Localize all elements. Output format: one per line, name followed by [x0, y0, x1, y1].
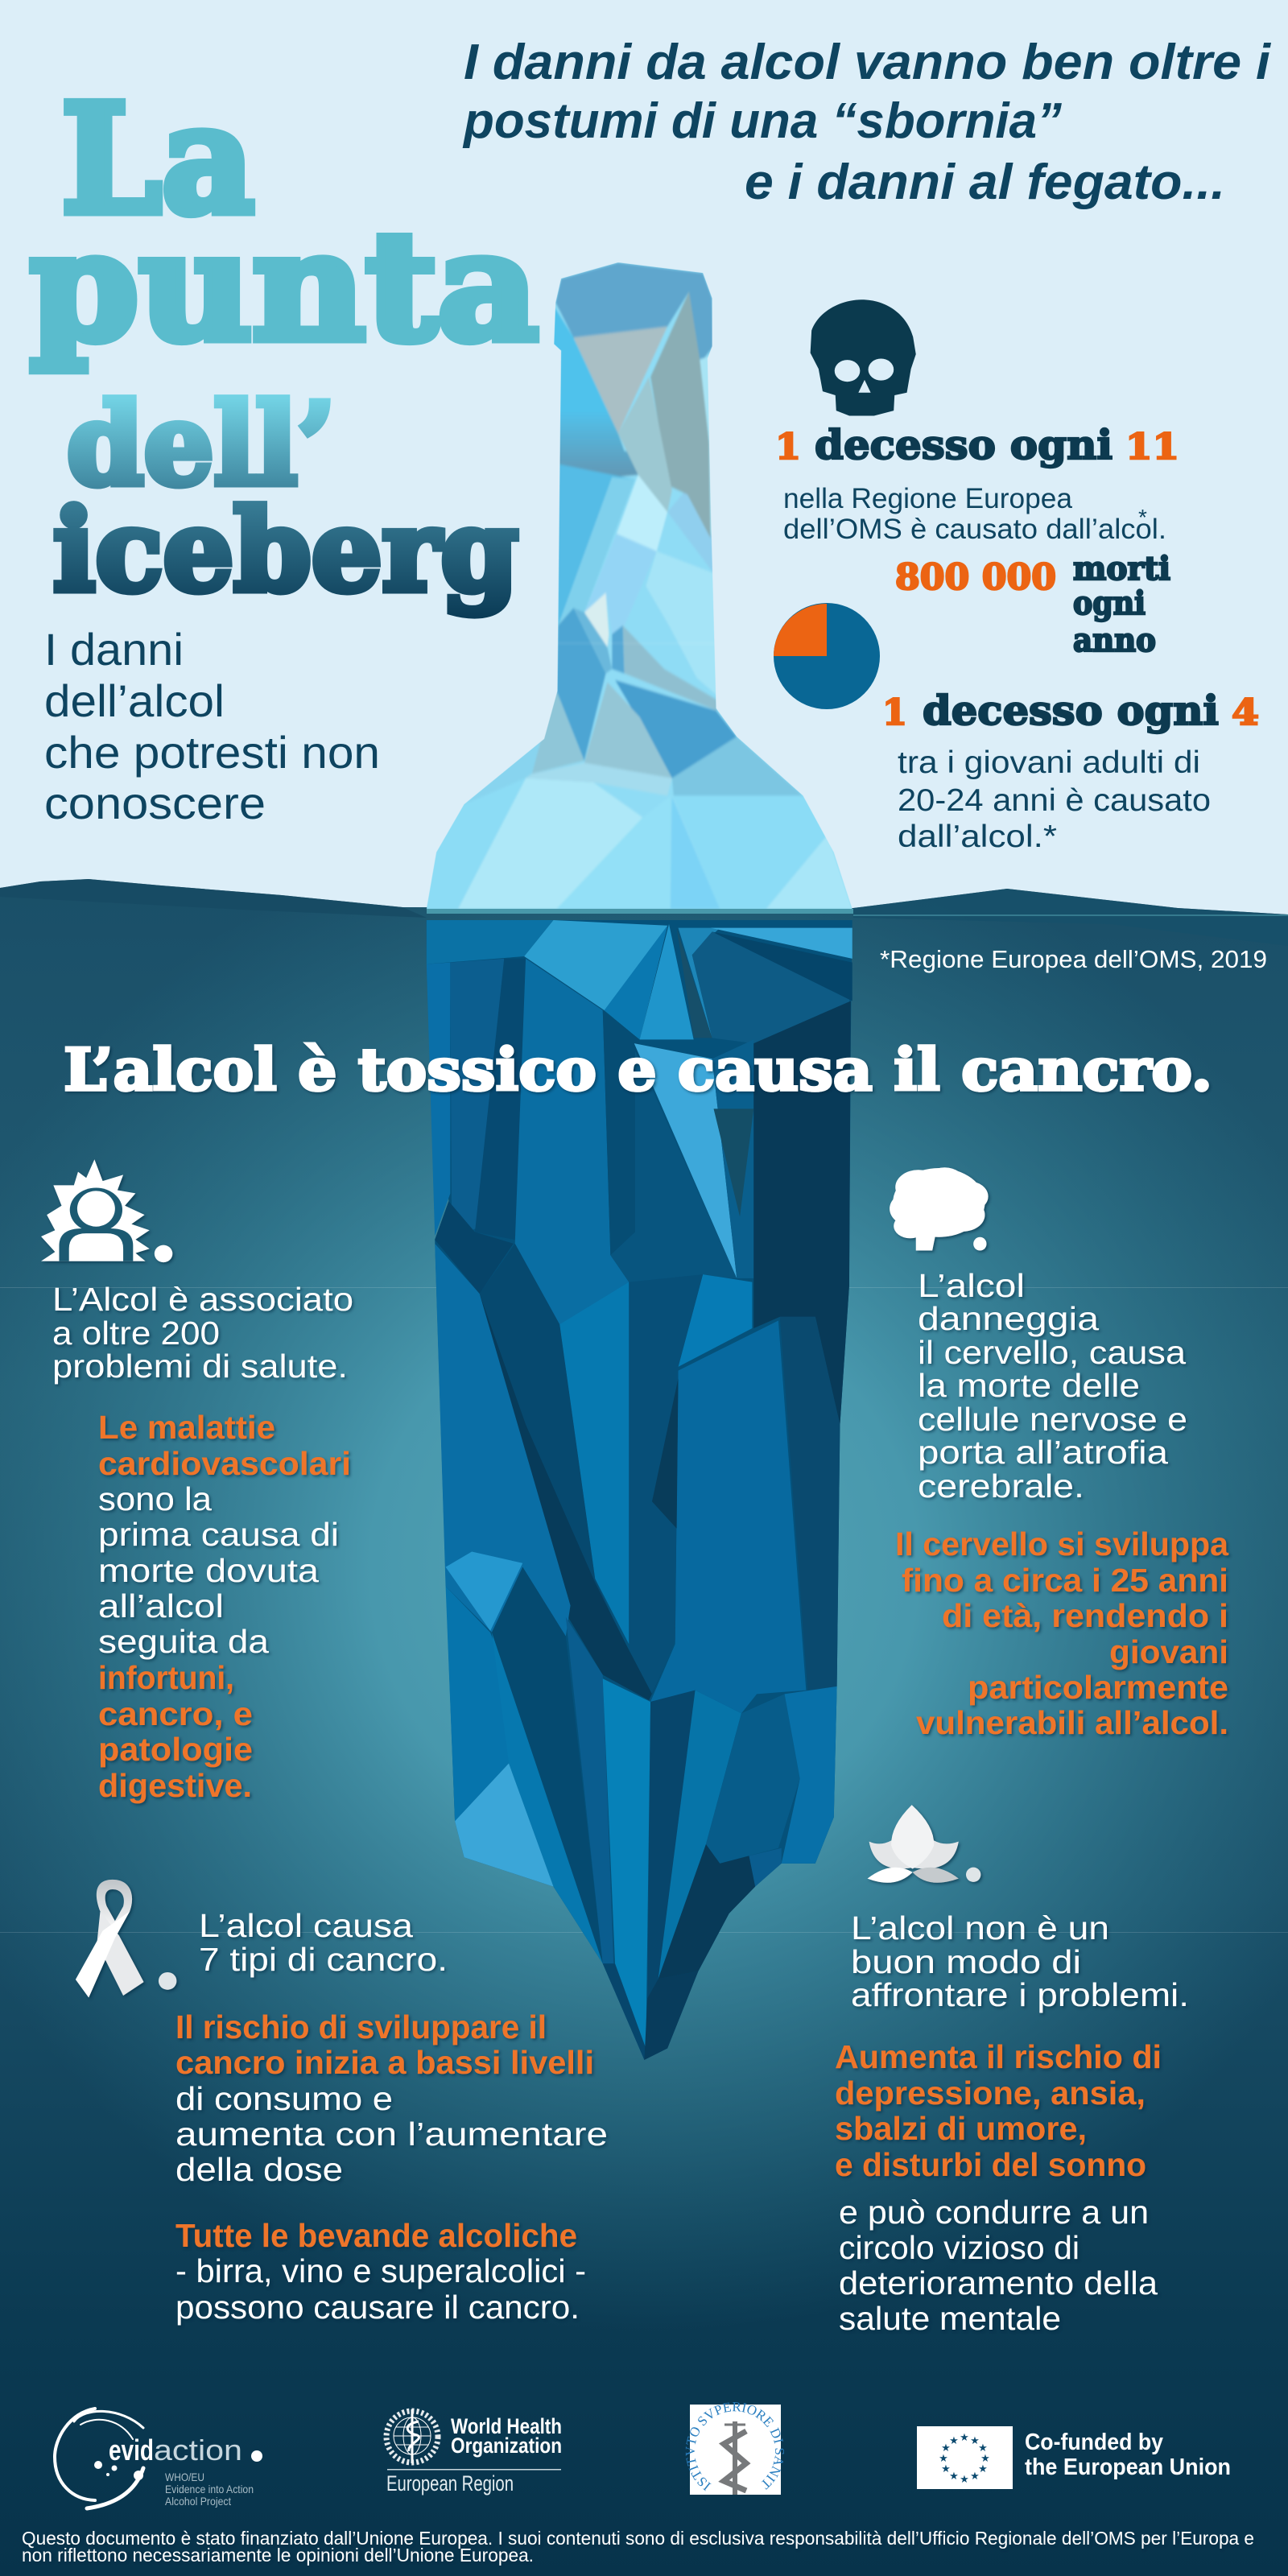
- stat text: European Region: dell’OMS è causato dall’alcol.: [783, 514, 1166, 545]
- main title: iceberg: [53, 485, 518, 617]
- stat: 800 000 deaths: morti: [1073, 550, 1170, 588]
- text: depression risk: depressione, ansia,: [835, 2074, 1146, 2112]
- text: developing brain: vulnerabili all’alcol.: [916, 1704, 1228, 1741]
- text: all alcoholic drinks: possono causare il cancro.: [175, 2289, 580, 2326]
- stat: 1 death in 11: decesso ogni: [815, 421, 1113, 469]
- subtitle: I danni: [44, 624, 184, 675]
- text: brain damage: danneggia: [918, 1300, 1099, 1337]
- logo: evidaction: [55, 2409, 262, 2508]
- main title: [30, 71, 539, 617]
- heading top right: e i danni al fegato...: [745, 155, 1225, 210]
- disclaimer: Questo documento è stato finanziato dall’Unione Europea. I suoi contenuti sono di esclusiva responsabilità dell’Ufficio Regionale dell’OMS per l’Europa e: [22, 2528, 1254, 2549]
- logo: evidaction: Alcohol Project: [165, 2495, 231, 2508]
- text: all alcoholic drinks: [175, 2217, 586, 2326]
- text: vicious circle: e può condurre a un: [839, 2194, 1149, 2231]
- text: risk at low levels: di consumo e: [175, 2080, 393, 2117]
- text: developing brain: particolarmente: [968, 1669, 1228, 1706]
- stat: 1 death in 4: 1: [882, 692, 907, 733]
- logo: European Union flag: ★: [941, 2463, 951, 2475]
- text: vicious circle: deterioramento della: [839, 2264, 1158, 2301]
- stat text: young adults: tra i giovani adulti di: [898, 745, 1200, 780]
- water line: [427, 909, 853, 914]
- text: brain damage: L’alcol: [918, 1267, 1025, 1304]
- logo: European Union flag: ★: [980, 2453, 990, 2465]
- text: over 200 problems: L’Alcol è associato: [52, 1281, 353, 1318]
- logo: evidaction: WHO/EU: [165, 2471, 204, 2483]
- text: over 200 problems: problemi di salute.: [52, 1348, 348, 1385]
- icon: lotus: [868, 1805, 980, 1883]
- text: developing brain: Il cervello si sviluppa: [895, 1525, 1229, 1563]
- text: cardiovascular diseases: all’alcol: [98, 1587, 224, 1624]
- logo: World Health Organization: [386, 2409, 562, 2496]
- text: all alcoholic drinks: Tutte le bevande alcoliche: [175, 2217, 577, 2254]
- text: not a way to cope: affrontare i problemi.: [851, 1976, 1189, 2013]
- text: depression risk: sbalzi di umore,: [835, 2110, 1087, 2147]
- pie chart: one quarter: [774, 603, 880, 709]
- text: cardiovascular diseases: cancro, e: [98, 1695, 253, 1732]
- text: risk at low levels: Il rischio di sviluppare il: [175, 2008, 547, 2046]
- text: cardiovascular diseases: sono la: [98, 1480, 212, 1517]
- panel: health problems: [41, 1159, 353, 1804]
- text: seven cancers: L’alcol causa: [199, 1907, 413, 1944]
- text: developing brain: [895, 1525, 1229, 1741]
- text: brain damage: il cervello, causa: [918, 1334, 1186, 1371]
- main title: punta: [30, 198, 539, 374]
- stat: 800 000 deaths: [895, 550, 1170, 659]
- sea background: [0, 805, 1288, 2576]
- logo: World Health Organization: European Region: [386, 2471, 514, 2496]
- icon: ribbon: [76, 1880, 176, 1997]
- text: vicious circle: salute mentale: [839, 2300, 1061, 2337]
- stat text: European Region: *: [1138, 505, 1147, 530]
- text: co-funded by the European Union: the European Union: [1025, 2454, 1231, 2480]
- text: over 200 problems: [52, 1281, 353, 1385]
- logo: European Union flag: ★: [949, 2435, 959, 2447]
- stat: 800 000 deaths: 800 000: [895, 557, 1056, 598]
- logo: European Union flag: ★: [970, 2435, 980, 2447]
- logo: evidaction: action: [154, 2434, 242, 2467]
- logo: European Union flag: ★: [960, 2474, 969, 2486]
- stat text: European Region: [783, 483, 1166, 545]
- text: developing brain: fino a circa i 25 anni: [902, 1562, 1228, 1599]
- logo: European Union flag: ★: [978, 2442, 988, 2454]
- stat text: young adults: 20-24 anni è causato: [898, 783, 1211, 818]
- heading top right: [462, 35, 1272, 210]
- stat: 800 000 deaths: ogni: [1073, 584, 1146, 622]
- logo: World Health Organization: Organization: [451, 2434, 562, 2458]
- text: co-funded by the European Union: [1025, 2429, 1231, 2480]
- text: brain damage: cerebrale.: [918, 1468, 1084, 1505]
- logo: European Union flag: ★: [978, 2463, 988, 2475]
- text: cardiovascular diseases: digestive.: [98, 1767, 252, 1804]
- text: depression risk: e disturbi del sonno: [835, 2146, 1146, 2183]
- text: brain damage: porta all’atrofia: [918, 1434, 1168, 1471]
- iceberg under water: [427, 920, 852, 2060]
- panel: brain: [890, 1167, 1229, 1741]
- text: cardiovascular diseases: morte dovuta: [98, 1552, 319, 1589]
- text: vicious circle: [839, 2194, 1158, 2337]
- icon: skull: [811, 299, 916, 415]
- text: cardiovascular diseases: prima causa di: [98, 1516, 339, 1553]
- text: risk at low levels: [175, 2008, 608, 2188]
- text: over 200 problems: a oltre 200: [52, 1315, 220, 1352]
- icon: person with burst: [41, 1159, 172, 1262]
- stat: 1 death in 4: decesso ogni: [923, 687, 1219, 734]
- text: not a way to cope: [851, 1909, 1189, 2013]
- text: brain damage: la morte delle: [918, 1367, 1140, 1404]
- logo: European Union flag: ★: [939, 2453, 948, 2465]
- text: cardiovascular diseases: Le malattie: [98, 1409, 275, 1446]
- text: cardiovascular diseases: patologie: [98, 1731, 253, 1768]
- logo: World Health Organization: World Health: [451, 2414, 562, 2438]
- main title: La: [61, 71, 254, 247]
- stat: 800 000 deaths: anno: [1073, 621, 1156, 659]
- text: cardiovascular diseases: seguita da: [98, 1623, 269, 1660]
- subtitle: conoscere: [44, 778, 266, 828]
- text: cardiovascular diseases: infortuni,: [98, 1659, 234, 1696]
- logo: evidaction: evid: [109, 2434, 154, 2467]
- logo: European Union flag: ★: [941, 2442, 951, 2454]
- footnote region: *Regione Europea dell’OMS, 2019: [880, 945, 1267, 973]
- stat text: young adults: [898, 745, 1211, 854]
- subtitle: dell’alcol: [44, 675, 225, 726]
- stat text: European Region: nella Regione Europea: [783, 483, 1073, 514]
- text: all alcoholic drinks: - birra, vino e superalcolici -: [175, 2252, 586, 2289]
- panel: mental health: [835, 1805, 1189, 2337]
- bottle above water: [427, 262, 852, 910]
- main title: dell’: [67, 379, 336, 511]
- disclaimer: non riflettono necessariamente le opinioni dell’Unione Europea.: [22, 2545, 534, 2566]
- text: risk at low levels: aumenta con l’aumentare: [175, 2116, 608, 2153]
- stat: 1 death in 11: 11: [1125, 427, 1179, 468]
- logo: evidaction: Evidence into Action: [165, 2483, 254, 2496]
- text: vicious circle: circolo vizioso di: [839, 2229, 1080, 2266]
- text: developing brain: giovani: [1109, 1633, 1228, 1670]
- subtitle: che potresti non: [44, 727, 380, 778]
- text: seven cancers: [199, 1907, 448, 1978]
- stat: 1 death in 11: 1: [775, 427, 801, 468]
- text: cardiovascular diseases: cardiovascolari: [98, 1445, 351, 1482]
- stat: 1 death in 4: 4: [1232, 692, 1259, 733]
- heading top right: postumi di una “sbornia”: [462, 93, 1062, 149]
- text: co-funded by the European Union: Co-funded by: [1025, 2429, 1163, 2455]
- text: not a way to cope: buon modo di: [851, 1943, 1081, 1980]
- logo: European Union flag: [917, 2426, 1013, 2489]
- icon: brain: [890, 1167, 989, 1251]
- text: risk at low levels: della dose: [175, 2151, 343, 2188]
- subtitle: [44, 624, 380, 828]
- text: developing brain: di età, rendendo i: [942, 1597, 1228, 1634]
- logo: Istituto Superiore di Sanità: [686, 2402, 784, 2495]
- text: brain damage: cellule nervose e: [918, 1401, 1187, 1438]
- logo: European Union flag: ★: [960, 2432, 969, 2444]
- section heading: L’alcol è tossico e causa il cancro.: [64, 1035, 1212, 1104]
- panel: cancer: [76, 1880, 608, 2326]
- disclaimer: [22, 2528, 1254, 2566]
- text: cardiovascular diseases: [98, 1409, 351, 1804]
- text: risk at low levels: cancro inizia a bassi livelli: [175, 2044, 594, 2081]
- logo: European Union flag: ★: [949, 2471, 959, 2483]
- logo: Istituto Superiore di Sanità: ISTITVTO SVPERIORE DI SANITA: [686, 2402, 784, 2491]
- background sky: [0, 0, 1288, 918]
- logo: European Union flag: ★: [970, 2471, 980, 2483]
- text: depression risk: [835, 2038, 1162, 2183]
- heading top right: I danni da alcol vanno ben oltre i: [464, 35, 1272, 90]
- stat text: young adults: dall’alcol.*: [898, 819, 1057, 854]
- text: seven cancers: 7 tipi di cancro.: [199, 1941, 448, 1978]
- text: depression risk: Aumenta il rischio di: [835, 2038, 1162, 2075]
- text: brain damage: [918, 1267, 1187, 1505]
- text: not a way to cope: L’alcol non è un: [851, 1909, 1109, 1946]
